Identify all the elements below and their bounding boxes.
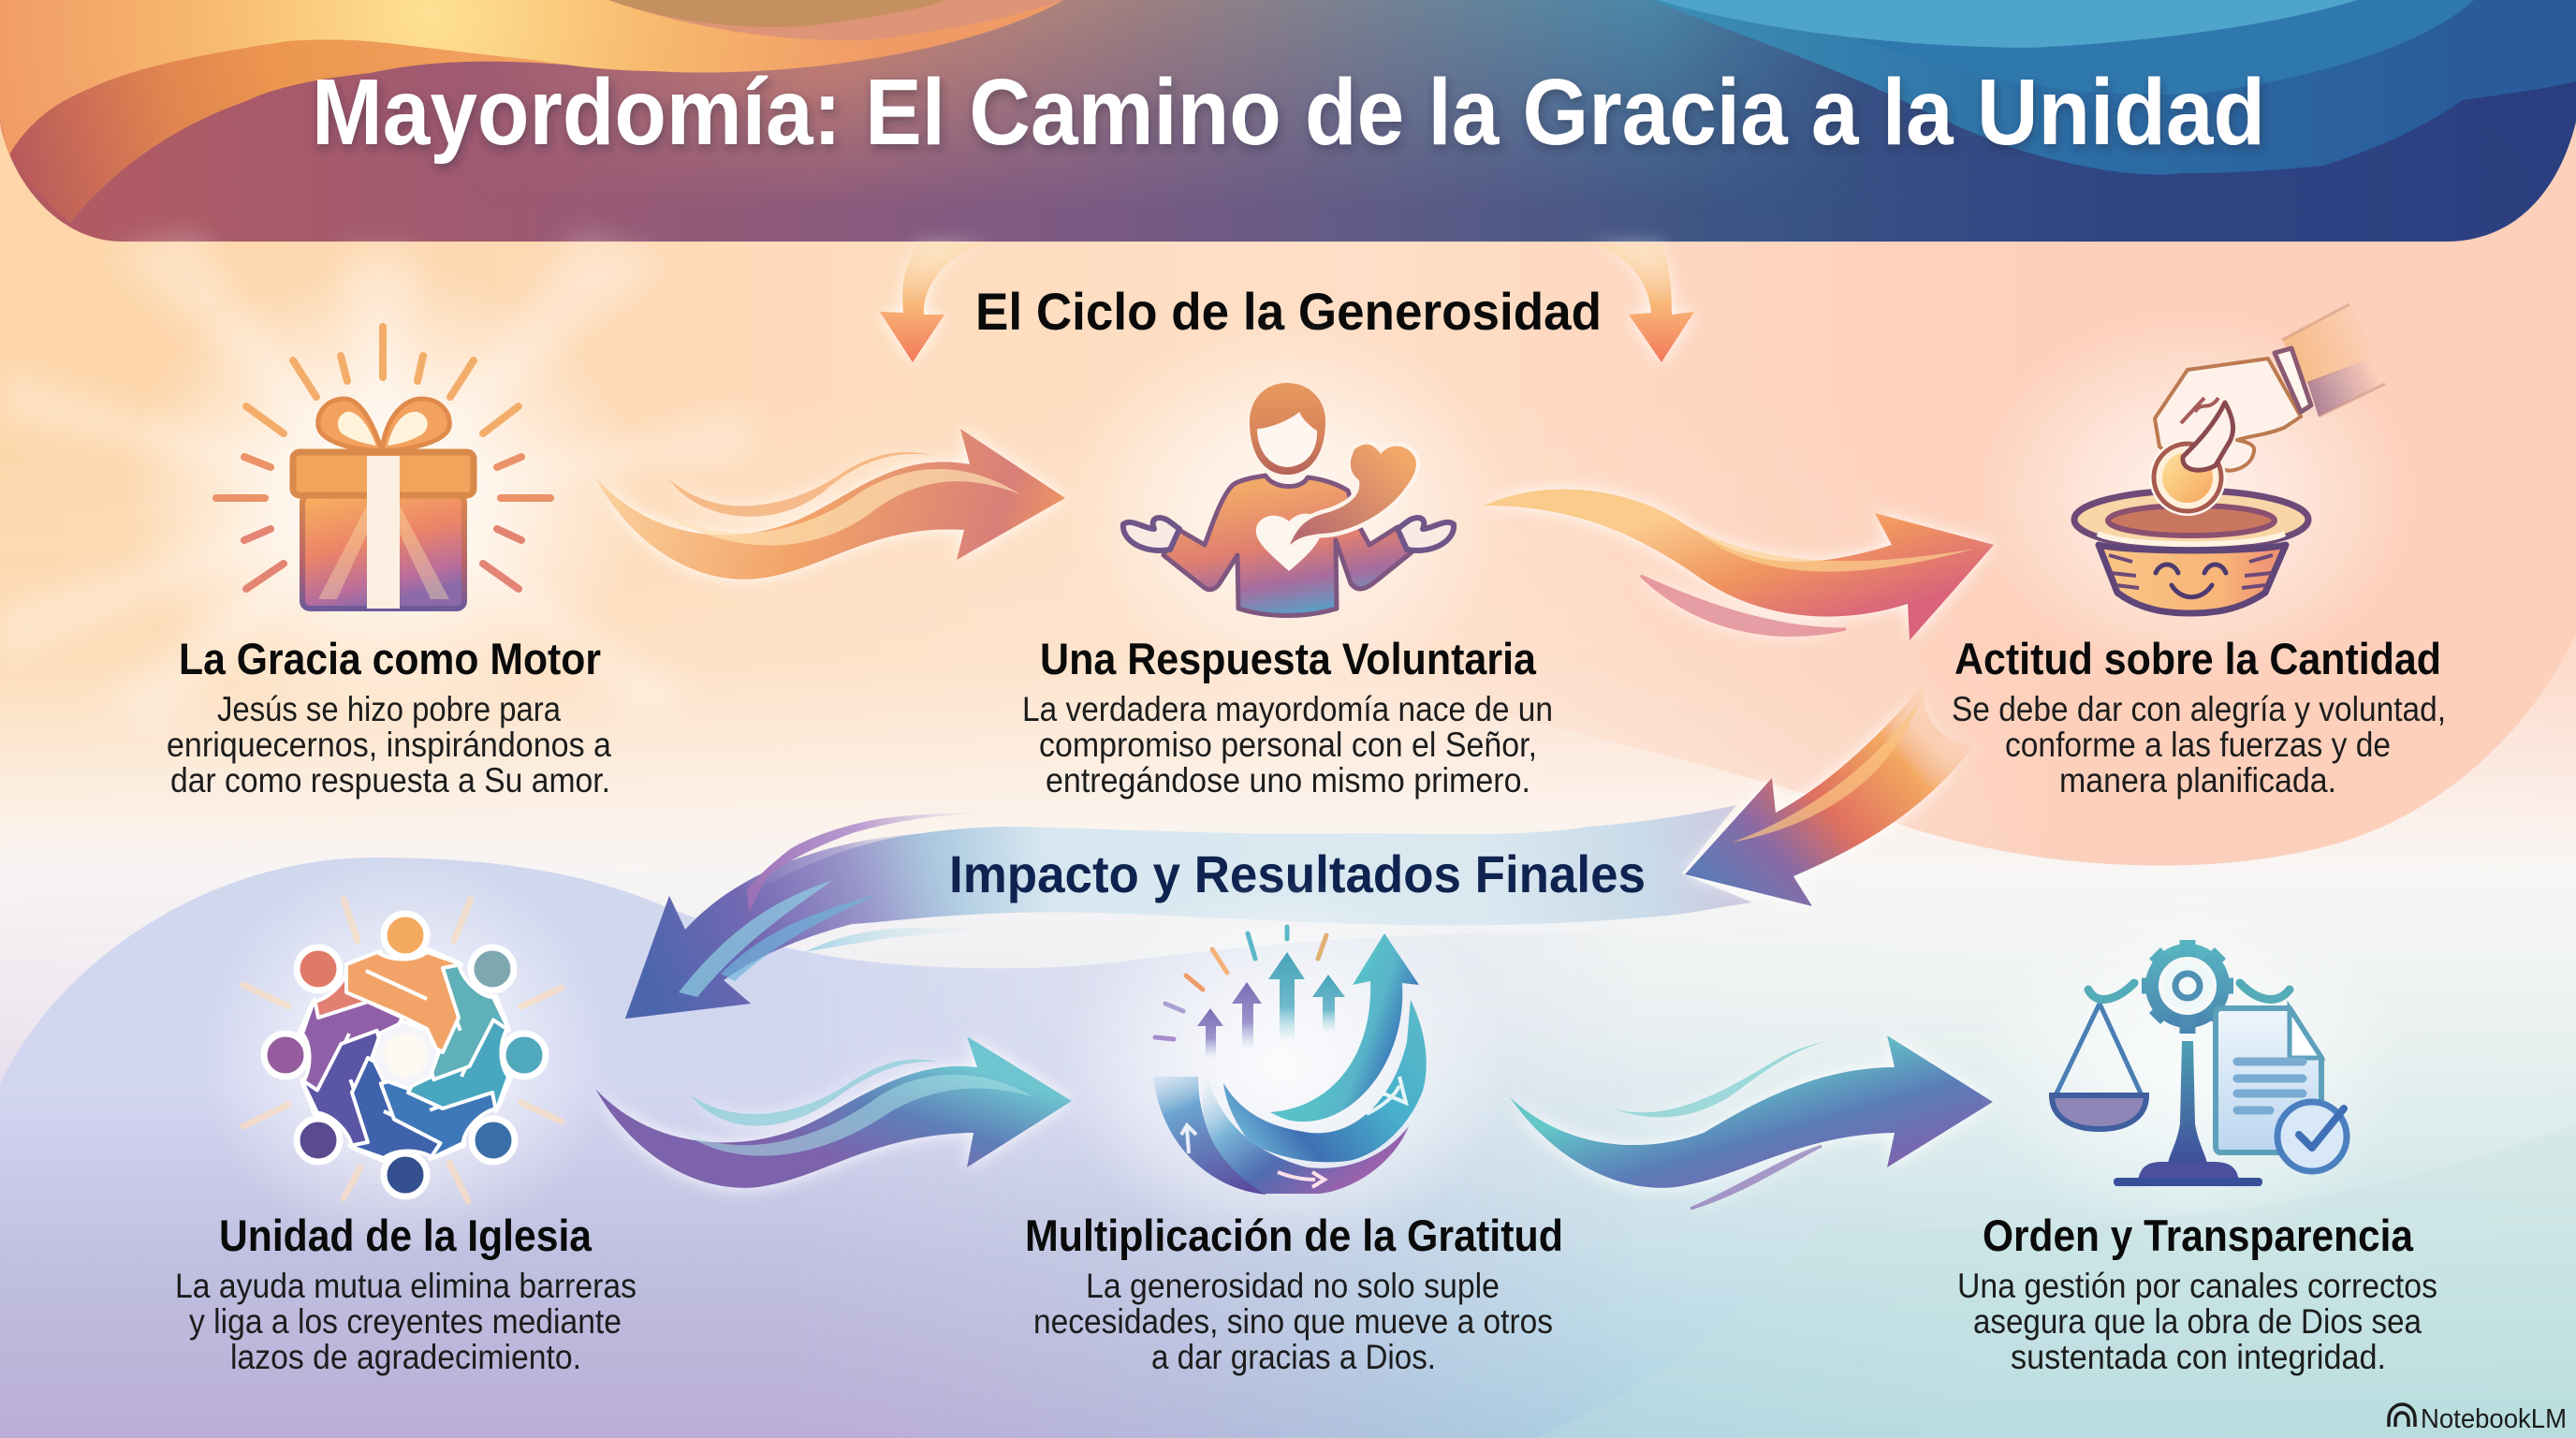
heading: Unidad de la Iglesia bbox=[219, 1211, 593, 1260]
arrow: respuesta to actitud bbox=[1485, 490, 1994, 640]
section heading: ciclo: El Ciclo de la Generosidad bbox=[975, 282, 1602, 341]
arrow: multiplicacion to orden bbox=[1510, 1035, 1993, 1209]
body text bbox=[1022, 690, 1553, 800]
body text: necesidades, sino que mueve a otros bbox=[1033, 1302, 1553, 1341]
card: actitud bbox=[1952, 304, 2446, 800]
card: respuesta bbox=[1022, 318, 1553, 800]
body text: enriquecernos, inspirándonos a bbox=[167, 726, 611, 764]
heading: Multiplicación de la Gratitud bbox=[1025, 1211, 1563, 1260]
icon: rising arrows swoosh bbox=[1058, 880, 1507, 1255]
title: Mayordomía: El Camino de la Gracia a la Unidad bbox=[312, 60, 2265, 165]
body text bbox=[167, 690, 611, 800]
body text: La verdadera mayordomía nace de un bbox=[1022, 690, 1553, 728]
arrow: unidad to multiplicacion bbox=[595, 1036, 1072, 1188]
body text bbox=[1957, 1267, 2437, 1376]
body text: dar como respuesta a Su amor. bbox=[170, 761, 610, 800]
arrow: down left bbox=[880, 243, 998, 362]
body text: Jesús se hizo pobre para bbox=[217, 690, 561, 728]
body text: Se debe dar con alegría y voluntad, bbox=[1952, 690, 2446, 728]
header banner bbox=[0, 0, 2576, 243]
icon: gift bbox=[0, 234, 749, 730]
heading: Orden y Transparencia bbox=[1983, 1211, 2414, 1260]
icon: circle of people bbox=[199, 854, 611, 1256]
body text: entregándose uno mismo primero. bbox=[1046, 761, 1530, 800]
arrow: down right bbox=[1575, 243, 1694, 362]
body text: asegura que la obra de Dios sea bbox=[1973, 1302, 2422, 1341]
heading: Una Respuesta Voluntaria bbox=[1040, 634, 1537, 683]
body text: La ayuda mutua elimina barreras bbox=[175, 1267, 637, 1305]
body text: y liga a los creyentes mediante bbox=[189, 1302, 622, 1341]
heading: Actitud sobre la Cantidad bbox=[1954, 634, 2441, 683]
body text: sustentada con integridad. bbox=[2011, 1338, 2386, 1376]
body text: lazos de agradecimiento. bbox=[230, 1338, 581, 1376]
body text: La generosidad no solo suple bbox=[1086, 1267, 1500, 1305]
body text bbox=[1033, 1267, 1553, 1376]
body text: compromiso personal con el Señor, bbox=[1039, 726, 1537, 764]
body text: manera planificada. bbox=[2059, 761, 2336, 800]
body text: Una gestión por canales correctos bbox=[1957, 1267, 2437, 1305]
card: orden bbox=[1957, 889, 2437, 1376]
icon: person with heart bbox=[1063, 318, 1513, 693]
icon: hand and pot with coin bbox=[1967, 304, 2416, 683]
body text: a dar gracias a Dios. bbox=[1151, 1338, 1436, 1376]
section heading: impacto: Impacto y Resultados Finales bbox=[949, 844, 1646, 903]
heading: La Gracia como Motor bbox=[179, 634, 601, 683]
card: multiplicacion bbox=[1025, 880, 1563, 1376]
arrow: actitud to impacto bbox=[1685, 683, 1973, 906]
arrow: impacto band bbox=[625, 805, 1752, 1019]
arrow: gracia to respuesta bbox=[595, 429, 1065, 580]
body text bbox=[175, 1267, 637, 1376]
icon: scale gear document bbox=[1975, 889, 2406, 1245]
body text bbox=[1952, 690, 2446, 800]
watermark: NotebookLM: NotebookLM bbox=[2421, 1404, 2567, 1434]
body text: conforme a las fuerzas y de bbox=[2005, 726, 2391, 764]
card: gracia bbox=[0, 234, 749, 800]
card: unidad bbox=[175, 854, 637, 1376]
